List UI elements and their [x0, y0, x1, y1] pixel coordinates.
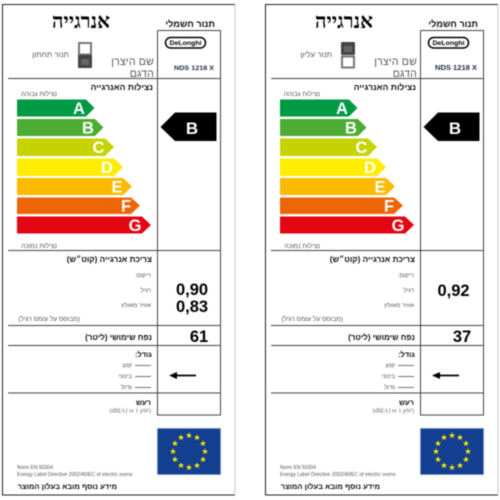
footer note: מידע נוסף מובא בעלון המוצר — [18, 482, 117, 491]
size legend: גודל: — [398, 350, 415, 359]
supplier and model label: שם היצרן — [374, 56, 417, 68]
size legend — [382, 350, 415, 391]
supplier and model label: הדגם — [393, 68, 417, 80]
oven type label: תנור עליון — [300, 50, 332, 59]
consumption rows: רגיל — [140, 286, 151, 294]
norm text: Norm EN 50304 — [17, 465, 53, 471]
size legend: גודל: — [135, 350, 152, 359]
bar D: D — [101, 159, 113, 177]
logo: DeLonghi: DeLonghi — [432, 40, 465, 47]
bar G: G — [392, 217, 404, 235]
high efficiency label: נצילות גבוהה — [284, 90, 320, 98]
rating arrow B — [160, 112, 216, 141]
panel: lower oven energy label — [2, 4, 235, 495]
noise label — [373, 398, 414, 414]
consumption rows: אוויר מאולץ — [384, 301, 414, 309]
consumption rows: ריקום: — [135, 272, 151, 279]
bar F: F — [121, 198, 131, 216]
low efficiency label: נצילות נמוכה — [21, 242, 57, 250]
supplier and model label: הדגם — [130, 68, 154, 80]
supplier and model label — [111, 56, 154, 80]
panel border — [2, 4, 235, 495]
EU flag — [420, 428, 484, 474]
norm text: Energy Label Directive 2002/40/EC of electric ovens — [17, 472, 133, 478]
supplier and model label: שם היצרן — [111, 56, 154, 68]
panel: upper oven energy label — [266, 4, 498, 495]
value: volume: 37 — [453, 328, 471, 346]
bar A: A — [73, 100, 85, 118]
heading: electric oven: תנור חשמלי — [165, 19, 215, 29]
logo: DeLonghi — [166, 38, 206, 48]
norm text — [17, 465, 133, 478]
consumption rows — [281, 272, 414, 323]
title: אנרגייה — [52, 9, 110, 33]
norm text: Energy Label Directive 2002/40/EC of electric ovens — [280, 472, 396, 478]
arrow: medium size — [432, 372, 459, 379]
heading: electric oven: תנור חשמלי — [428, 19, 478, 29]
consumption rows: (מבוסס על עומס רגיל) — [281, 315, 343, 323]
bar C: C — [356, 139, 368, 157]
rating arrow B: B — [449, 119, 461, 138]
noise label: (dB[A] re 1 pW) — [373, 408, 414, 414]
noise label — [110, 398, 151, 414]
bar D: D — [364, 159, 376, 177]
model number: NDS 1218 X — [435, 63, 477, 72]
rating arrow B — [424, 112, 480, 141]
logo: DeLonghi — [428, 38, 468, 48]
value: forced air: 0,83 — [176, 298, 208, 316]
consumption rows: אוויר מאולץ — [121, 301, 151, 309]
rating arrow B: B — [186, 119, 198, 138]
value: conventional: 0,90 — [176, 281, 208, 299]
energy consumption heading: צריכת אנרגייה (קוט״ש) — [67, 255, 152, 264]
energy consumption heading: צריכת אנרגייה (קוט״ש) — [330, 255, 415, 264]
title: אנרגייה — [315, 9, 373, 33]
low efficiency label: נצילות נמוכה — [284, 242, 320, 250]
high efficiency label: נצילות גבוהה — [21, 90, 57, 98]
bar B: B — [82, 120, 94, 138]
footer note: מידע נוסף מובא בעלון המוצר — [281, 482, 380, 491]
bar B: B — [345, 120, 357, 138]
norm text: Norm EN 50304 — [280, 465, 316, 471]
arrow: medium size — [169, 372, 196, 379]
norm text — [280, 465, 396, 478]
heading: energy efficiency: נצילות האנרגייה — [354, 82, 416, 92]
oven type label: תנור תחתון — [32, 50, 69, 59]
panel border — [266, 4, 498, 495]
usable volume heading: נפח שימושי (ליטר) — [348, 333, 415, 342]
bar G: G — [129, 217, 141, 235]
value: conventional: 0,92 — [437, 282, 470, 300]
noise label: רעש — [399, 398, 414, 407]
size legend: בינוני — [119, 373, 132, 380]
bar E: E — [111, 178, 123, 196]
size legend: בינוני — [382, 373, 395, 380]
size legend: גדול — [384, 383, 395, 391]
EU flag — [158, 428, 220, 474]
value: volume: 61 — [190, 328, 208, 346]
model number: NDS 1218 X — [174, 65, 214, 72]
energy scale arrows A to G — [17, 100, 151, 235]
icon: oven with lower cavity highlighted — [78, 43, 92, 68]
energy scale arrows A to G — [280, 100, 414, 235]
icon: oven with upper cavity highlighted — [341, 42, 355, 68]
noise label: רעש — [136, 398, 151, 407]
supplier and model label — [374, 56, 417, 80]
size legend: גדול — [121, 383, 132, 391]
consumption rows: (מבוסס על עומס רגיל) — [18, 315, 80, 323]
bar E: E — [374, 178, 386, 196]
consumption rows: רגיל — [404, 286, 414, 294]
logo: DeLonghi: DeLonghi — [170, 40, 202, 47]
size legend — [119, 350, 152, 391]
noise label: (dB[A] re 1 pW) — [110, 408, 151, 414]
bar A: A — [336, 100, 348, 118]
consumption rows — [18, 272, 151, 323]
heading: energy efficiency: נצילות האנרגייה — [91, 82, 153, 92]
consumption rows: ריקום: — [398, 272, 414, 279]
size legend: קטן — [386, 362, 395, 369]
usable volume heading: נפח שימושי (ליטר) — [85, 333, 152, 342]
size legend: קטן — [123, 362, 132, 369]
bar F: F — [384, 198, 394, 216]
bar C: C — [93, 139, 105, 157]
